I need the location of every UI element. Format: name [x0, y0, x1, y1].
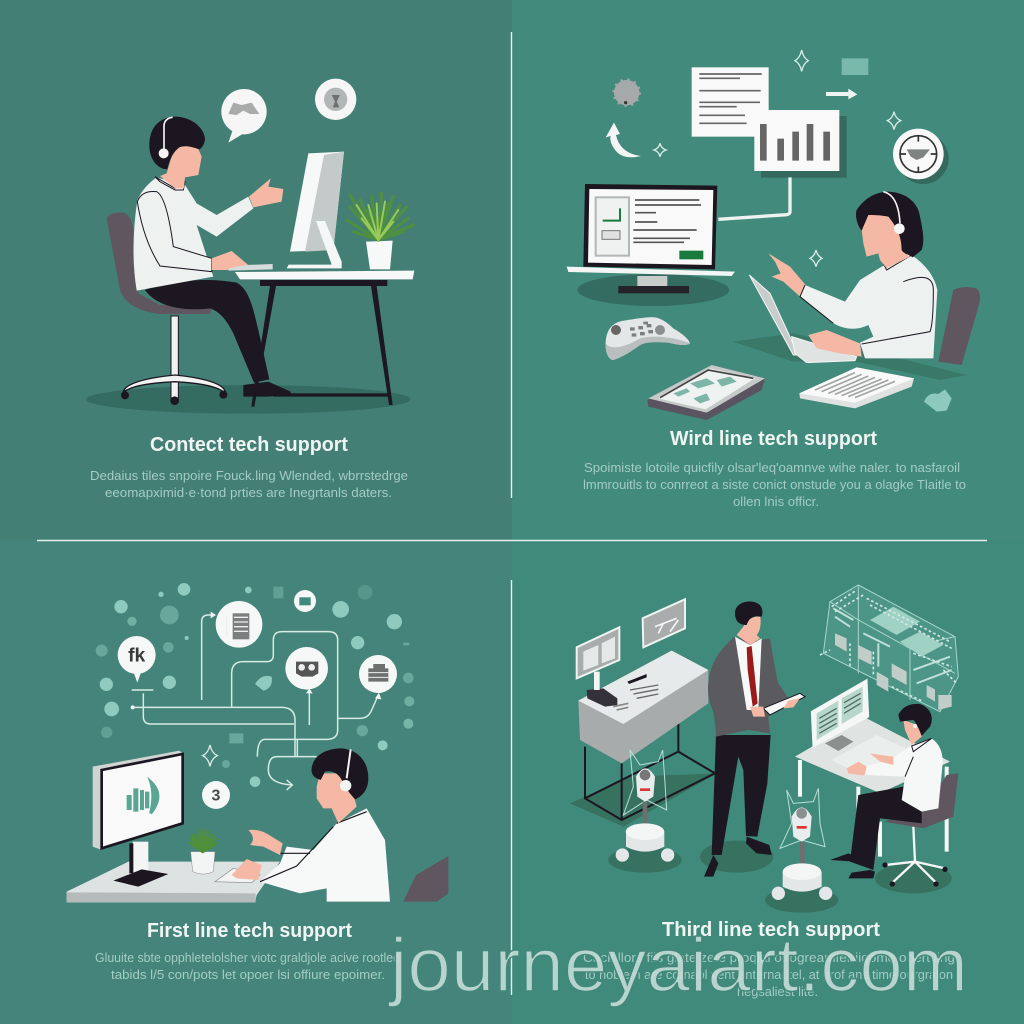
icon: gamepad — [606, 317, 690, 360]
text block: to noblem are cornaol vent anternadtel, at grof ans time ourgralon — [585, 968, 953, 982]
text block — [583, 461, 966, 509]
illustration: network and agent — [67, 583, 448, 902]
text block: eeomapximid·e·tond prties are Inegrtanls daters. — [105, 486, 392, 500]
heading: Contect tech support — [150, 434, 348, 456]
plant — [191, 852, 215, 874]
text block: lmmrouitls to conrreot a siste conict onstude you a olagke Tlaitle to — [583, 478, 966, 492]
text block: Spoimiste lotoile quicfily olsar'leq'oamnve wihe naler. to nasfaroil — [584, 461, 960, 475]
heading: Third line tech support — [662, 919, 880, 941]
text block: Cack llors fils glate zete proqial olrogreamfer iigome obert ling — [583, 951, 955, 965]
icon: network nodes — [118, 590, 397, 809]
illustration: person at desk — [86, 79, 414, 414]
text block — [90, 469, 408, 500]
person — [260, 808, 390, 902]
left desk — [570, 773, 717, 827]
text block — [95, 951, 400, 982]
illustration: specialists with servers — [570, 585, 958, 913]
icon: speech bubbles — [221, 79, 356, 143]
man — [700, 602, 805, 877]
icon: network nodes: fk — [128, 646, 146, 667]
seated person — [830, 704, 958, 893]
isometric server wireframe — [820, 585, 958, 712]
text block: tabids l/5 con/pots let opoer lsi offiure epoimer. — [111, 968, 385, 982]
text block: hegsaliest lite. — [737, 985, 818, 999]
panel: second line tech support — [567, 50, 980, 509]
robot left — [608, 750, 682, 873]
icon: network nodes: 3 — [212, 788, 221, 805]
icon: paper — [799, 367, 914, 408]
robot right — [765, 788, 838, 913]
panel: contact tech support — [86, 79, 414, 500]
text block: ollen lnis officr. — [733, 495, 819, 509]
text block: Dedaius tiles snpoire Fouck.ling Wlended, wbrrstedrge — [90, 469, 408, 483]
right desk — [795, 680, 950, 857]
decorative dots — [96, 583, 414, 787]
arrow — [606, 123, 641, 157]
panel: third line tech support — [570, 585, 958, 999]
text block: Gluuite sbte opphletelolsher viotc graldjole acive rootled — [95, 951, 400, 965]
text block — [583, 951, 955, 999]
panel: first line tech support — [67, 583, 448, 982]
watermark: journeyaiart.com — [388, 923, 968, 1008]
heading: First line tech support — [147, 920, 352, 942]
icon: tablet — [647, 365, 765, 420]
heading: Wird line tech support — [670, 428, 877, 450]
monitor — [93, 751, 183, 850]
illustration: woman at laptop — [567, 50, 980, 420]
desk — [67, 862, 280, 902]
